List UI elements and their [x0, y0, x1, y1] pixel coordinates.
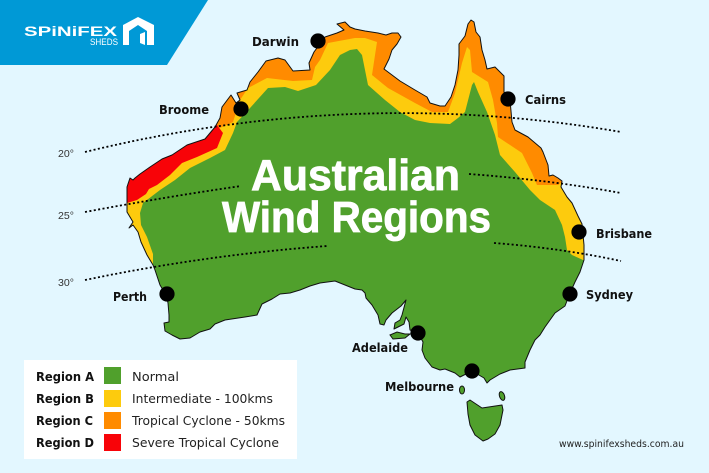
latitude 30 line right — [494, 243, 621, 261]
legend row: Region D: Region D — [36, 436, 94, 450]
label: Sydney: Sydney — [586, 288, 633, 302]
Region C orange band — [216, 21, 562, 185]
marker: Melbourne — [464, 363, 480, 379]
marker: Cairns — [500, 91, 516, 107]
banner shape — [0, 0, 208, 65]
label: Perth: Perth — [113, 290, 147, 304]
title — [222, 151, 491, 242]
city labels — [113, 35, 652, 394]
latitude 25 line right — [469, 174, 621, 193]
label: Brisbane: Brisbane — [596, 227, 652, 241]
marker: Perth — [159, 286, 175, 302]
Tasmania — [467, 400, 503, 441]
marker: Brisbane — [571, 224, 587, 240]
latitude 30 line left — [85, 246, 327, 280]
logo house icon — [123, 17, 154, 45]
label: Adelaide: Adelaide — [352, 341, 408, 355]
legend row: Region C: Tropical Cyclone - 50kms — [131, 414, 285, 428]
Region D red band — [128, 124, 223, 203]
latitude labels — [58, 148, 74, 289]
legend row: Region C: Region C — [36, 414, 93, 428]
coastal wind bands — [128, 21, 584, 264]
label 20 degrees: 20° — [58, 148, 74, 160]
legend row: Region D — [36, 434, 279, 451]
Flinders Island — [498, 391, 506, 401]
marker: Adelaide — [410, 325, 426, 341]
legend row: Region A: Region A — [36, 370, 95, 384]
logo wordmark: SPiNiFEX — [24, 24, 117, 39]
marker: Broome — [233, 101, 249, 117]
label: Cairns: Cairns — [525, 93, 566, 107]
label: Darwin: Darwin — [252, 35, 299, 49]
coastline outline — [127, 20, 584, 383]
legend row: Region B: Region B — [36, 392, 94, 406]
mainland: Region A green — [127, 20, 584, 383]
city markers — [159, 33, 587, 379]
King Island — [460, 386, 464, 394]
label 30 degrees: 30° — [58, 277, 74, 289]
legend row: Region A: Normal — [132, 370, 179, 384]
title line 1: Australian — [251, 151, 460, 200]
website url: www.spinifexsheds.com.au — [559, 439, 684, 450]
legend row: Region B — [36, 390, 273, 407]
Kangaroo Island — [390, 332, 410, 339]
legend panel — [24, 360, 297, 459]
label 25 degrees: 25° — [58, 210, 74, 222]
label: Broome: Broome — [159, 103, 209, 117]
legend row: Region D: Severe Tropical Cyclone — [132, 436, 279, 450]
label: Melbourne: Melbourne — [385, 380, 454, 394]
map of Australia with wind regions — [126, 20, 584, 442]
legend row: Region C — [36, 412, 285, 429]
legend — [24, 360, 297, 459]
marker: Darwin — [310, 33, 326, 49]
latitude 25 line left — [85, 186, 241, 212]
marker: Sydney — [562, 286, 578, 302]
legend row: Region A — [36, 367, 179, 384]
latitude lines — [85, 113, 621, 280]
legend row: Region B: Intermediate - 100kms — [132, 392, 273, 406]
Region B yellow band — [128, 38, 584, 264]
title line 2: Wind Regions — [222, 193, 491, 242]
logo banner — [0, 0, 208, 65]
logo subtitle: SHEDS — [90, 37, 118, 47]
latitude 20 line — [85, 113, 621, 152]
